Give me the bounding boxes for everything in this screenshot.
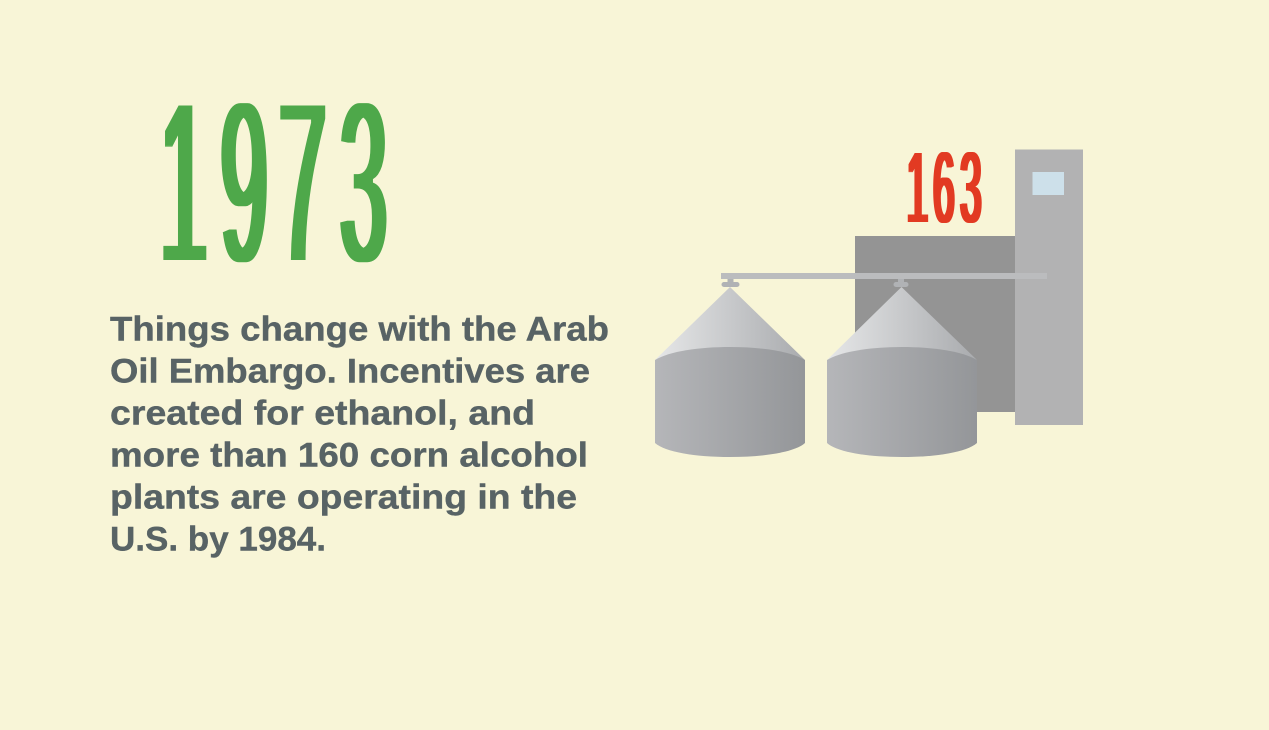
tower xyxy=(1015,150,1083,425)
corn alcohol plant illustration xyxy=(655,150,1083,457)
left valve xyxy=(722,279,740,287)
description text block: created for ethanol, and xyxy=(110,394,535,432)
tower window xyxy=(1032,172,1064,195)
description text block: Oil Embargo. Incentives are xyxy=(110,352,590,390)
left silo xyxy=(655,287,805,457)
description text block: Things change with the Arab xyxy=(110,310,609,348)
description text block: plants are operating in the xyxy=(110,478,577,516)
plant building xyxy=(855,236,1016,412)
connecting pipe xyxy=(721,273,1047,279)
right valve xyxy=(894,279,908,287)
description text block xyxy=(110,310,609,558)
description text block: U.S. by 1984. xyxy=(110,520,326,558)
right silo xyxy=(827,287,977,457)
description text block: more than 160 corn alcohol xyxy=(110,436,588,474)
year heading: 1973 xyxy=(161,54,387,311)
plant count number: 163 xyxy=(907,133,981,244)
